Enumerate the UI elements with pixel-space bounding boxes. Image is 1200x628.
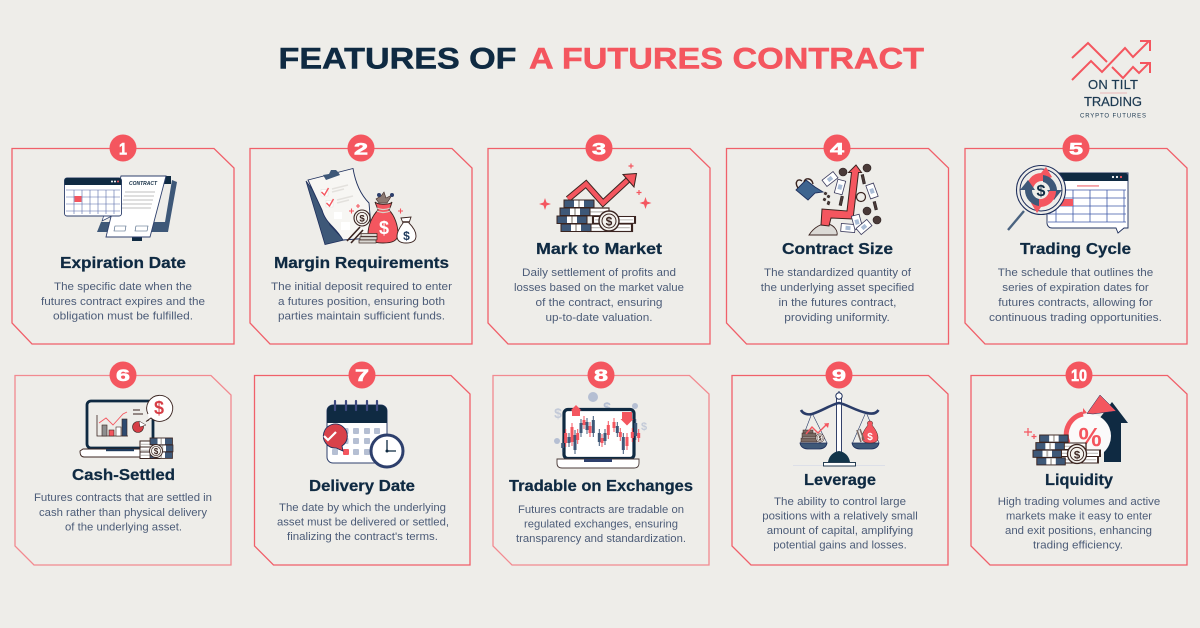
description: parties maintain sufficient funds. — [278, 310, 445, 322]
badge 7: 7 — [355, 366, 369, 385]
description — [514, 267, 684, 324]
panel: Contract Size — [726, 134, 948, 344]
badge 9: 9 — [832, 366, 846, 385]
description: The initial deposit required to enter — [271, 281, 452, 293]
description: Futures contracts are tradable on — [518, 504, 684, 516]
panel: Tradable on Exchanges — [493, 362, 709, 565]
badge 10: 10 — [1071, 366, 1087, 385]
description: a futures position, ensuring both — [278, 296, 445, 308]
description: obligation must be fulfilled. — [53, 310, 193, 322]
badge 5: 5 — [1069, 140, 1083, 158]
heading: Contract Size — [782, 241, 893, 258]
panel: Liquidity — [971, 362, 1187, 565]
description: futures contract expires and the — [41, 296, 205, 308]
badge 10 — [1066, 362, 1092, 388]
icon: calendar with clock — [323, 401, 403, 467]
description — [762, 496, 918, 552]
panel: Trading Cycle — [965, 134, 1187, 344]
panel: Expiration Date — [12, 134, 234, 344]
heading: Tradable on Exchanges — [509, 478, 693, 495]
heading: Liquidity — [1045, 472, 1113, 489]
icon: laptop with candlestick chart — [554, 392, 647, 468]
description: Futures contracts that are settled in — [34, 492, 212, 504]
panel: Cash-Settled — [15, 362, 231, 565]
icon: calendar and contract: CONTRACT — [129, 181, 158, 187]
icon: clipboard and money bags: $ — [403, 229, 410, 243]
badge 3 — [586, 134, 612, 162]
logo: On Tilt Trading: CRYPTO FUTURES — [1080, 114, 1146, 120]
description — [516, 504, 686, 545]
description — [271, 281, 452, 322]
badge 9 — [826, 362, 852, 388]
description: in the futures contract, — [778, 297, 896, 309]
icon: laptop with candlestick chart: $ — [641, 421, 647, 433]
title: FEATURES OF — [278, 42, 516, 76]
badge 7 — [348, 362, 376, 388]
icon: magnifier over calendar — [1008, 166, 1128, 233]
description: losses based on the market value — [514, 282, 684, 294]
icon: percent, arrow and money — [1024, 395, 1128, 465]
heading: Trading Cycle — [1020, 241, 1131, 258]
description: Daily settlement of profits and — [522, 267, 676, 279]
panel: Mark to Market — [488, 134, 710, 344]
icon: calendar and contract — [64, 176, 177, 241]
description: amount of capital, amplifying — [767, 525, 913, 537]
badge 8 — [588, 362, 614, 388]
description: continuous trading opportunities. — [989, 312, 1162, 324]
description: futures contracts, allowing for — [998, 297, 1153, 309]
description: series of expiration dates for — [1002, 282, 1149, 294]
description: The specific date when the — [54, 281, 192, 293]
description — [761, 267, 914, 324]
description — [277, 502, 449, 543]
panel: Leverage — [732, 362, 948, 565]
badge 1: 1 — [119, 140, 127, 158]
description: High trading volumes and active — [998, 496, 1160, 508]
icon: balance scale — [793, 391, 885, 466]
description: The date by which the underlying — [279, 502, 446, 514]
title — [278, 42, 924, 76]
panel: Margin Requirements — [250, 134, 472, 344]
logo: On Tilt Trading: ON TILT — [1088, 77, 1138, 92]
logo: On Tilt Trading — [1072, 41, 1150, 120]
heading: Expiration Date — [60, 255, 186, 272]
icon: laptop with charts: $ — [154, 398, 164, 418]
badge 1 — [110, 134, 136, 162]
icon: percent, arrow and money: % — [1078, 422, 1102, 452]
description: providing uniformity. — [784, 312, 890, 324]
badge 2: 2 — [354, 140, 368, 158]
heading: Leverage — [804, 472, 876, 489]
description — [989, 267, 1162, 324]
description — [34, 492, 212, 534]
panel: Delivery Date — [254, 362, 470, 565]
description: positions with a relatively small — [762, 510, 918, 522]
description: regulated exchanges, ensuring — [524, 518, 678, 530]
icon: rising chart and money — [539, 164, 652, 232]
badge 8: 8 — [594, 366, 608, 385]
heading: Margin Requirements — [274, 255, 449, 272]
icon: clipboard and money bags: $ — [379, 218, 389, 238]
description: of the contract, ensuring — [536, 297, 662, 309]
badge 4: 4 — [830, 140, 845, 158]
icon: balance scale: $ — [867, 432, 873, 443]
description: up-to-date valuation. — [546, 312, 652, 324]
description: cash rather than physical delivery — [39, 507, 207, 519]
title: A FUTURES CONTRACT — [529, 42, 924, 76]
description — [41, 281, 205, 322]
badge 6: 6 — [116, 366, 130, 385]
logo: On Tilt Trading: TRADING — [1084, 94, 1142, 109]
icon: laptop with candlestick chart: $ — [603, 399, 611, 415]
description: of the underlying asset. — [65, 522, 182, 534]
badge 3: 3 — [592, 140, 606, 158]
badge 2 — [348, 134, 374, 162]
icon: magnifier over calendar: $ — [1037, 183, 1046, 200]
heading: Mark to Market — [536, 241, 662, 258]
badge 4 — [824, 134, 850, 162]
badge 5 — [1062, 134, 1090, 162]
description: markets make it easy to enter — [1006, 510, 1152, 522]
description: the underlying asset specified — [761, 282, 914, 294]
description — [998, 496, 1160, 552]
description: The schedule that outlines the — [998, 267, 1153, 279]
description: trading efficiency. — [1033, 540, 1123, 552]
description: asset must be delivered or settled, — [277, 516, 449, 528]
description: and exit positions, enhancing — [1005, 525, 1152, 537]
heading: Cash-Settled — [72, 467, 175, 484]
badge 6 — [110, 362, 136, 388]
description: potential gains and losses. — [773, 540, 907, 552]
icon: laptop with charts — [80, 395, 173, 458]
description: The ability to control large — [774, 496, 906, 508]
description: transparency and standardization. — [516, 533, 686, 545]
icon: clipboard and money bags — [306, 168, 416, 244]
heading: Delivery Date — [309, 478, 415, 495]
description: The standardized quantity of — [764, 267, 912, 279]
description: finalizing the contract's terms. — [287, 531, 438, 543]
icon: laptop with candlestick chart: $ — [554, 405, 562, 421]
icon: watering can and growing arrow — [796, 164, 881, 235]
